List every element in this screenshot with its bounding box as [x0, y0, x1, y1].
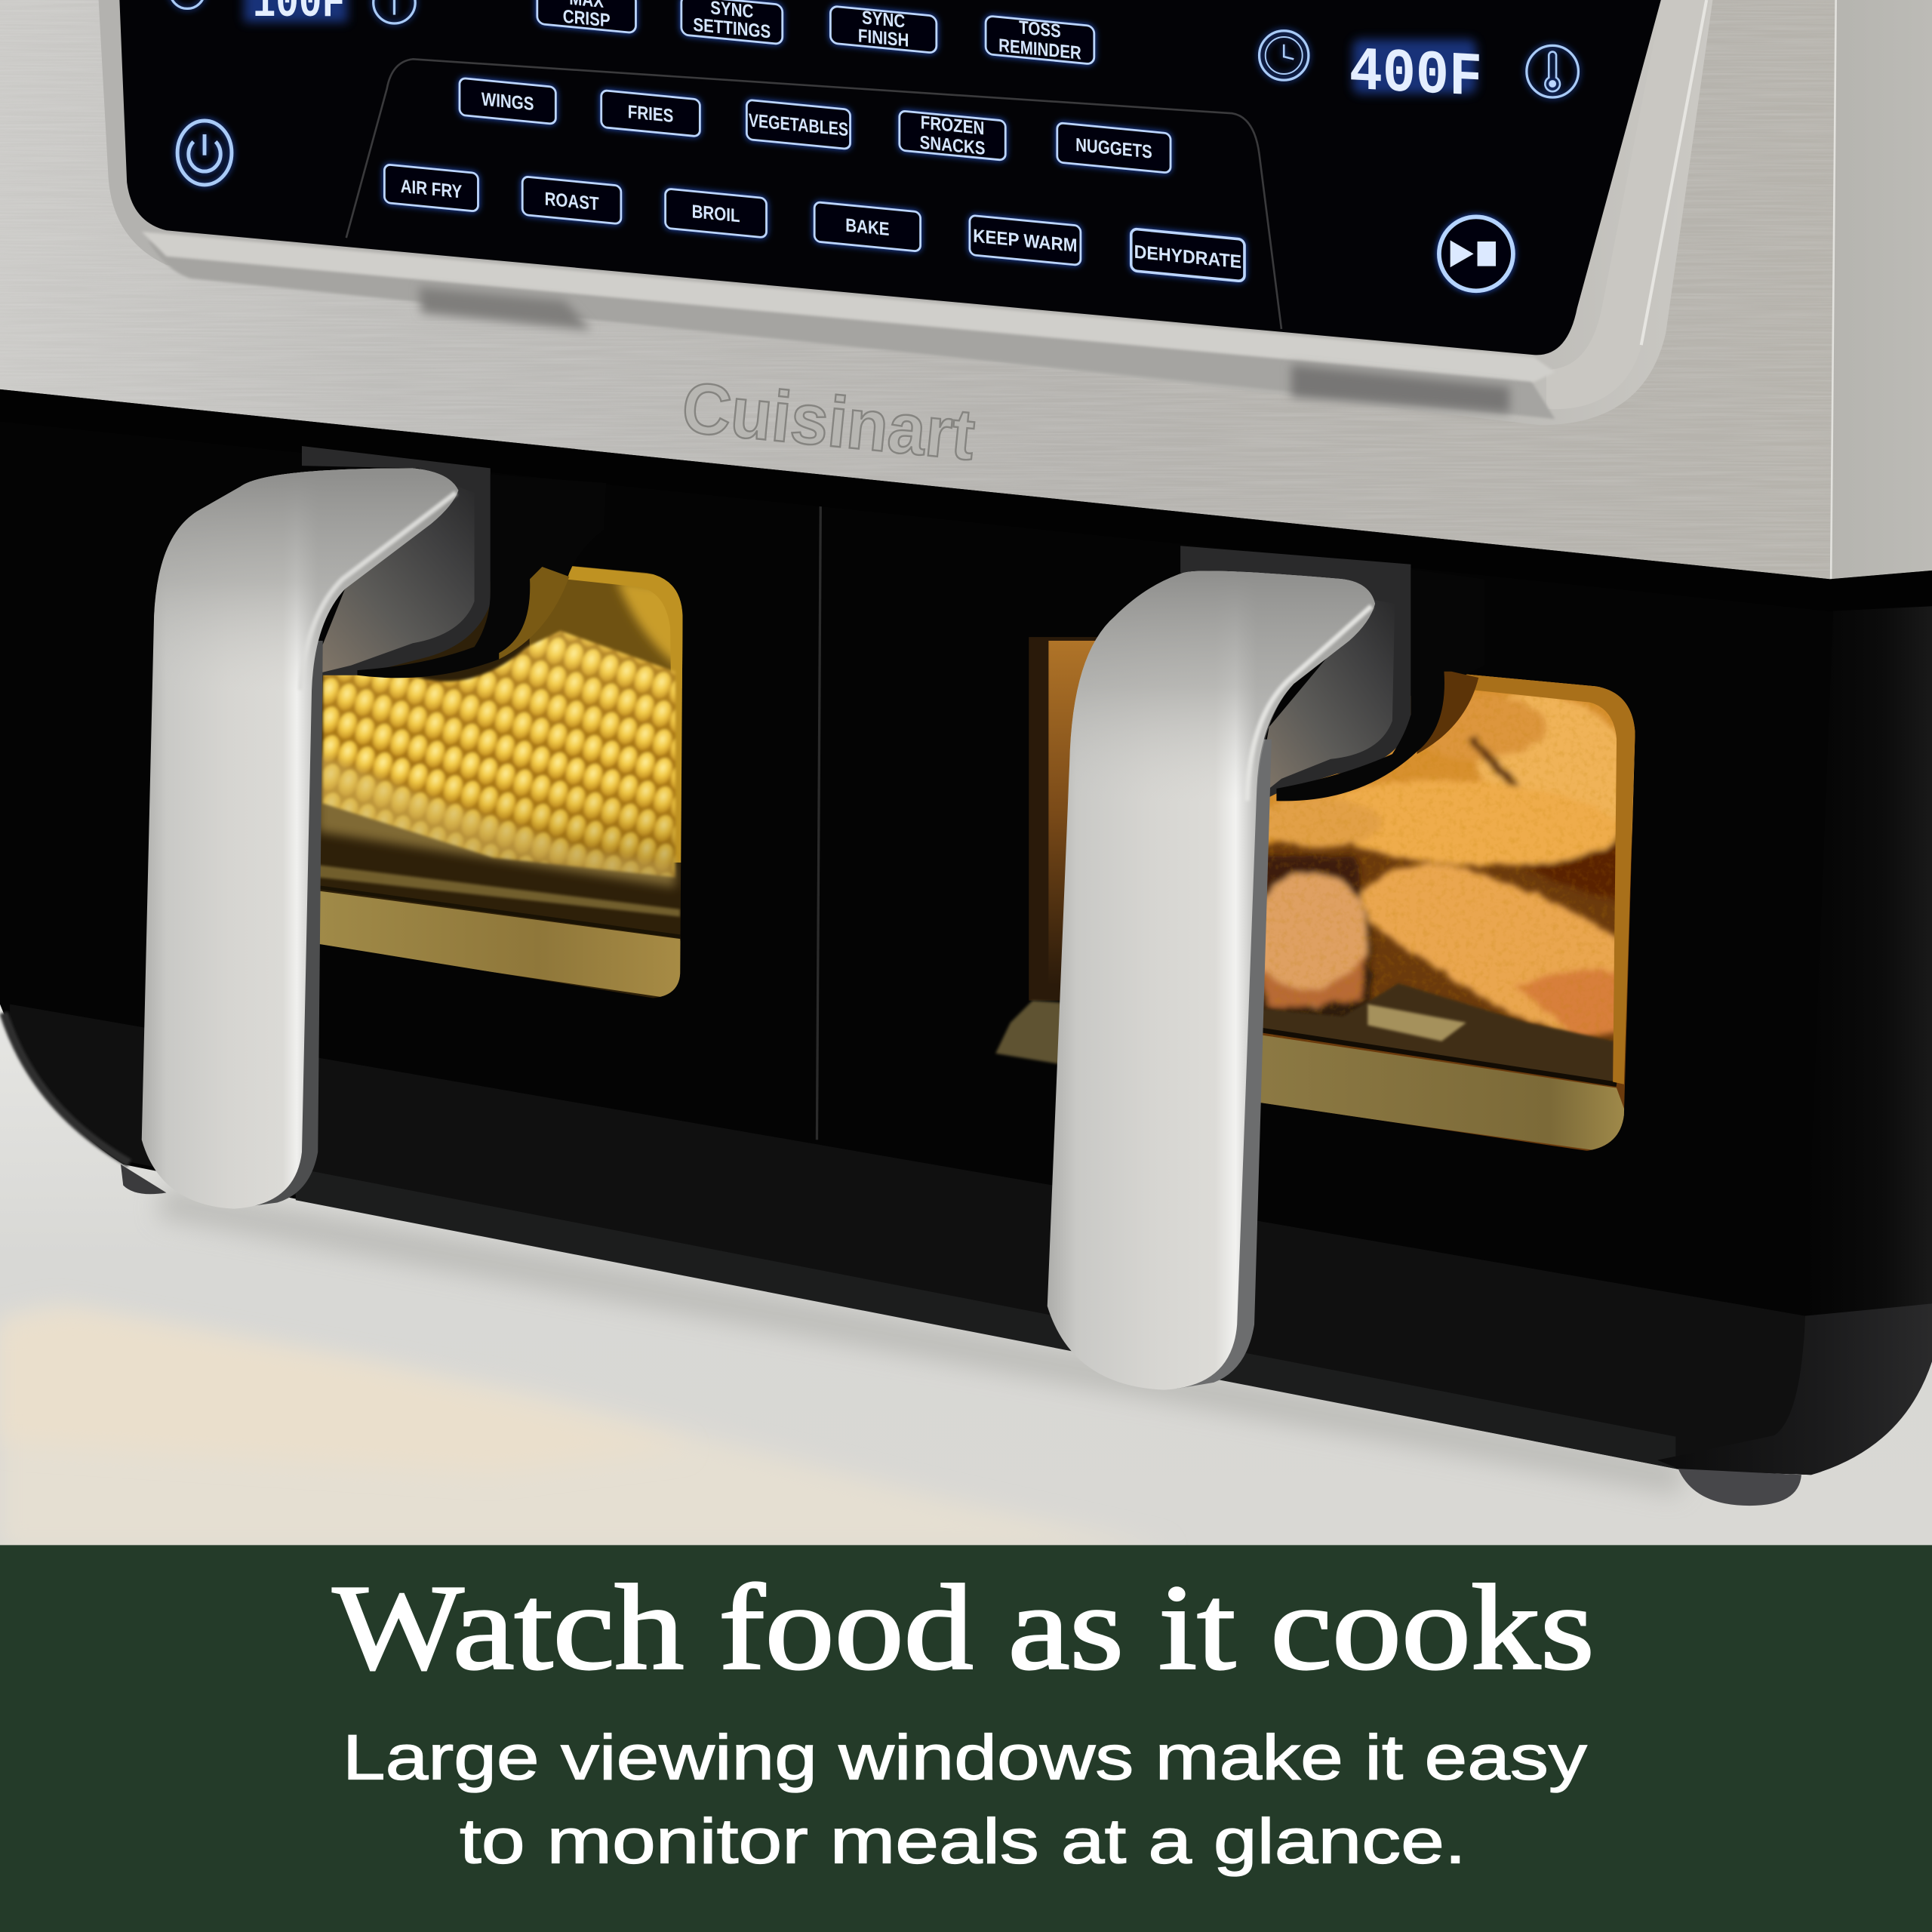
left corner rim [4, 1013, 129, 1163]
drawer top edge left [0, 419, 296, 446]
button: SYNC SETTINGS [681, 0, 783, 45]
button: TOSS REMINDER [986, 13, 1094, 65]
icon: power [177, 121, 232, 185]
green caption band [0, 1545, 1932, 1932]
button: BAKE [814, 202, 921, 251]
icon: clock right [1260, 31, 1309, 80]
stainless control housing [0, 0, 1932, 579]
tray front right [1244, 1032, 1626, 1153]
bezel around control panel [99, 0, 1712, 425]
button: NUGGETS: NUGGETS [1075, 134, 1152, 162]
button: ROAST: ROAST [545, 188, 599, 214]
button: ROAST [522, 177, 621, 224]
right handle top shading [1067, 571, 1375, 801]
left handle amber collar reflection [499, 567, 569, 659]
display: 400F: 400F [1349, 37, 1482, 114]
black band under housing [0, 389, 1932, 611]
glass floor with crumbs [1251, 983, 1614, 1084]
drawer divider [817, 503, 820, 1140]
button: FROZEN SNACKS: SNACKS [920, 131, 985, 158]
right handle amber collar reflection [1417, 672, 1478, 754]
heading: Watch food as it cooks [333, 1560, 1595, 1695]
left viewing window [308, 555, 690, 1011]
right bottom corner rim [1657, 1303, 1932, 1475]
button: NUGGETS [1057, 123, 1171, 173]
left handle edge highlight [300, 493, 456, 690]
right viewing window [1260, 675, 1635, 1151]
button: WINGS: WINGS [481, 88, 534, 114]
black lower body [0, 388, 1932, 1475]
button: BROIL [666, 189, 767, 238]
display glow [1353, 39, 1476, 94]
left handle [142, 446, 606, 1209]
button: BAKE: BAKE [845, 214, 890, 239]
button: SYNC FINISH [830, 3, 937, 54]
icon: start stop [1439, 217, 1513, 291]
right handle edge highlight [1247, 606, 1371, 801]
button: SYNC FINISH: FINISH [858, 25, 909, 51]
control panel screen [119, 0, 1661, 355]
button: MAX CRISP [537, 0, 635, 33]
food crumb texture [1251, 690, 1626, 1041]
glass above corn [530, 566, 682, 688]
button: SYNC SETTINGS: SETTINGS [693, 14, 771, 42]
button: DEHYDRATE [1131, 229, 1244, 281]
button: AIR FRY: AIR FRY [401, 175, 462, 202]
feet [121, 1164, 1801, 1506]
lower trim band [10, 1004, 1805, 1466]
tray front [318, 891, 685, 1001]
button: WINGS [460, 78, 555, 124]
glass floor reflections [318, 865, 680, 917]
icon: thermometer right [1527, 45, 1578, 97]
preset panel outline [346, 59, 1281, 329]
button: SYNC FINISH: SYNC [862, 6, 905, 32]
brushed metal texture [0, 0, 1932, 579]
button: FRIES [601, 90, 700, 137]
right side face [1805, 604, 1932, 1316]
button: KEEP WARM [970, 215, 1081, 266]
button: FROZEN SNACKS: FROZEN [921, 111, 984, 139]
left display partial: top glow [244, 0, 347, 22]
left handle top shading [154, 468, 458, 690]
button: KEEP WARM: KEEP WARM [973, 225, 1077, 256]
top-row and preset buttons [384, 0, 1244, 281]
left handle stem housing [302, 446, 491, 675]
right viewing window rear panel [995, 637, 1103, 1067]
body line 1: Large viewing windows make it easy [343, 1721, 1588, 1793]
button: BROIL: BROIL [692, 200, 740, 226]
button: DEHYDRATE: DEHYDRATE [1134, 241, 1241, 272]
button: TOSS REMINDER: REMINDER [998, 34, 1081, 63]
left handle side rim [240, 641, 323, 1208]
button: FROZEN SNACKS [900, 109, 1005, 161]
glowing window edge [1449, 672, 1635, 1084]
lowest gray rim [296, 1168, 1675, 1469]
right handle [1048, 546, 1484, 1390]
right handle side rim [1177, 740, 1272, 1389]
button: VEGETABLES [746, 100, 851, 149]
floor surface [0, 961, 1932, 1552]
button: FRIES: FRIES [628, 100, 673, 126]
button: TOSS REMINDER: TOSS [1019, 17, 1061, 42]
button: MAX CRISP: CRISP [563, 5, 611, 31]
icon: clock left partial [170, 0, 205, 8]
left handle stem [310, 487, 475, 675]
air fryer [0, 0, 1932, 1506]
right handle stem housing [1180, 546, 1411, 803]
right handle grip [1048, 571, 1375, 1390]
strip corner highlight [1831, 0, 1836, 579]
right handle stem [1257, 600, 1395, 798]
corn cob [318, 631, 675, 888]
right metal strip [1829, 0, 1932, 579]
left handle grip [142, 468, 458, 1209]
button: AIR FRY [384, 165, 478, 211]
logo: Cuisinart: Cuisinart [678, 368, 978, 475]
right handle collar [1276, 569, 1484, 801]
button: VEGETABLES: VEGETABLES [749, 109, 848, 140]
body line 2: to monitor meals at a glance. [460, 1805, 1466, 1877]
icon: thermometer left partial [374, 0, 415, 23]
food: chicken tenders [1263, 675, 1635, 1038]
left handle collar [357, 475, 606, 678]
